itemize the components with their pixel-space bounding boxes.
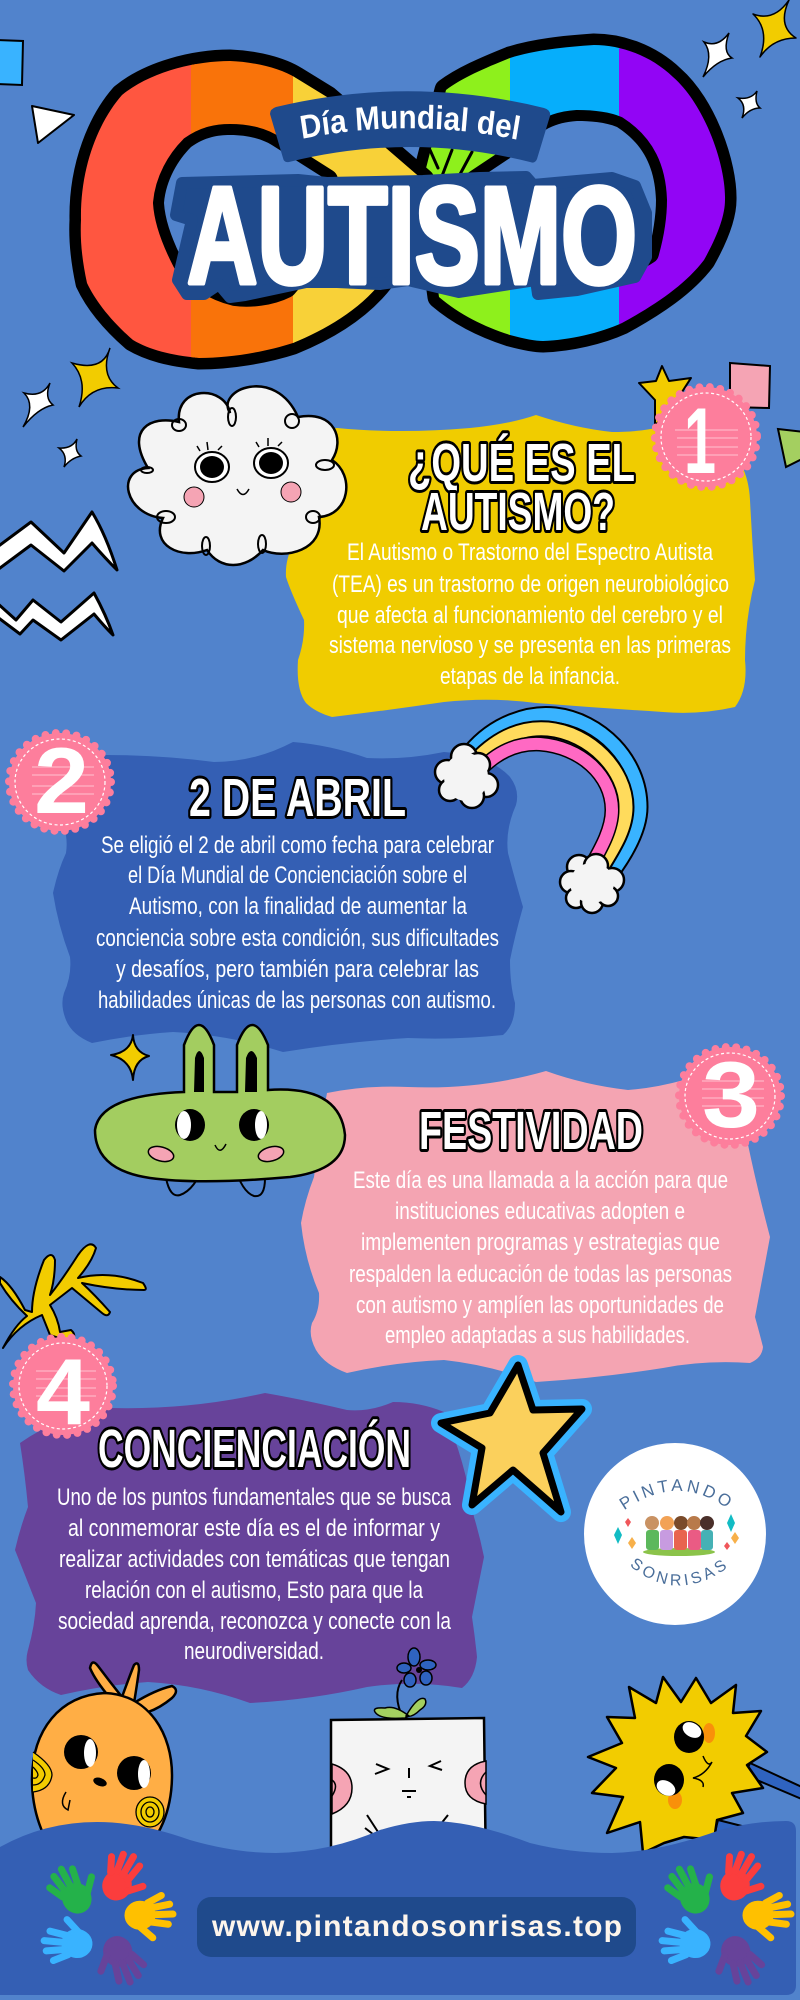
flower bbox=[374, 1648, 436, 1718]
logo: Pintando Sonrisas bbox=[584, 1443, 766, 1625]
icon: green triangle bbox=[778, 429, 800, 467]
body text: realizar actividades con temáticas que tengan bbox=[59, 1546, 450, 1573]
sun mouth bbox=[693, 1756, 712, 1787]
body text: Autismo, con la finalidad de aumentar la bbox=[129, 893, 468, 920]
panel: 2 de abril bbox=[53, 742, 523, 1052]
cloud cheeks bbox=[184, 482, 301, 507]
bunny eyes bbox=[175, 1109, 269, 1141]
badge scallop bbox=[655, 387, 757, 487]
bunny body bbox=[95, 1025, 345, 1181]
banner text: Día Mundial del bbox=[300, 104, 520, 140]
left loop colours bbox=[80, 61, 418, 358]
heading: ¿QUÉ ES EL bbox=[408, 433, 635, 493]
star halo bbox=[441, 1365, 582, 1512]
bunny legs bbox=[166, 1158, 265, 1196]
character: green bunny bbox=[95, 1025, 345, 1196]
icon: white triangle bbox=[32, 106, 74, 143]
icon: yellow star bbox=[639, 366, 692, 425]
icon: gold sparkle top right bbox=[753, 0, 796, 57]
logo disc bbox=[584, 1443, 766, 1625]
icon: large star bbox=[441, 1365, 582, 1512]
url pill: www.pintandosonrisas.top bbox=[211, 1910, 622, 1943]
panel: concienciación bbox=[15, 1393, 484, 1703]
logo curved text: SONRISAS bbox=[631, 1558, 726, 1586]
body text: y desafíos, pero también para celebrar las bbox=[116, 956, 479, 983]
orange body bbox=[32, 1693, 172, 1860]
badge scallop bbox=[13, 1337, 113, 1435]
body text: al conmemorar este día es el de informar y bbox=[68, 1515, 440, 1542]
icon: cyan square bbox=[0, 40, 23, 85]
panel background bbox=[15, 1393, 484, 1703]
panel: qué es el autismo bbox=[286, 415, 755, 717]
icon: hands left bbox=[42, 1847, 174, 1991]
title banner: Día Mundial del bbox=[270, 91, 550, 163]
body text: el Día Mundial de Concienciación sobre el bbox=[128, 862, 467, 889]
icon: white zigzag lower bbox=[0, 593, 113, 640]
icon: white sparkle left bbox=[23, 383, 53, 427]
bunny ears inner bbox=[194, 1051, 257, 1092]
heading: FESTIVIDAD bbox=[419, 1101, 643, 1161]
panel: festividad bbox=[301, 1071, 770, 1382]
character: white cloud bbox=[128, 386, 346, 565]
logo children bbox=[643, 1516, 715, 1556]
badge 1 bbox=[655, 387, 757, 493]
body text: Uno de los puntos fundamentales que se busca bbox=[57, 1484, 452, 1511]
lower cloud bbox=[560, 854, 624, 913]
badge scallop bbox=[9, 733, 111, 831]
icon: yellow branch bbox=[0, 1244, 146, 1348]
logo curved text bbox=[619, 1479, 731, 1586]
banner shape bbox=[270, 91, 550, 163]
icon: white sparkle top right bbox=[703, 33, 732, 77]
square face bbox=[365, 1761, 448, 1838]
body text: instituciones educativas adopten e bbox=[395, 1198, 685, 1225]
body text: implementen programas y estrategias que bbox=[361, 1229, 720, 1256]
footer wave bbox=[0, 1821, 796, 1995]
body text bbox=[349, 1167, 732, 1349]
orange swirls bbox=[33, 1752, 164, 1827]
title: AUTISMO bbox=[176, 159, 646, 313]
body text: conciencia sobre esta condición, sus dificultades bbox=[96, 925, 499, 952]
number: 3 bbox=[702, 1042, 760, 1147]
left hole bbox=[164, 135, 337, 296]
heading bbox=[408, 433, 635, 542]
title backing shape bbox=[176, 177, 646, 297]
badge dashed ring bbox=[685, 1053, 775, 1139]
badge 3 bbox=[679, 1042, 781, 1147]
badge 4 bbox=[13, 1337, 113, 1444]
orange mouth bbox=[62, 1792, 70, 1810]
left loop outline bbox=[81, 61, 423, 358]
body text: etapas de la infancia. bbox=[440, 663, 620, 690]
rainbow bands bbox=[470, 714, 640, 875]
number: 2 bbox=[34, 728, 89, 833]
bunny cheeks bbox=[147, 1144, 285, 1164]
body text bbox=[96, 832, 499, 1014]
body text: sociedad aprenda, reconozca y conecte con la bbox=[58, 1608, 452, 1635]
character: white square bbox=[331, 1648, 486, 1880]
sun eyes bbox=[654, 1719, 704, 1799]
icon: hands right bbox=[660, 1847, 792, 1991]
badge 2 bbox=[9, 728, 111, 833]
body text: relación con el autismo, Esto para que la bbox=[85, 1577, 423, 1604]
logo centre crossing bbox=[430, 150, 472, 178]
panel background bbox=[286, 415, 755, 717]
orange antennae bbox=[90, 1662, 176, 1712]
url pill bbox=[197, 1897, 636, 1957]
icon: gold sparkle left bbox=[72, 348, 118, 407]
cloud curls bbox=[141, 408, 334, 555]
footer band bbox=[0, 1821, 796, 1995]
logo: rainbow infinity bbox=[60, 30, 739, 370]
icon: gold sparkle near bunny bbox=[111, 1035, 149, 1080]
cloud body bbox=[128, 386, 346, 565]
cloud eyes bbox=[195, 438, 288, 482]
icon: small white star left bbox=[59, 439, 81, 467]
body text: empleo adaptadas a sus habilidades. bbox=[385, 1322, 690, 1349]
badge stripes bbox=[702, 1081, 764, 1106]
character: yellow spiky sun bbox=[588, 1677, 800, 1853]
body text: neurodiversidad. bbox=[184, 1638, 324, 1665]
number: 1 bbox=[684, 388, 716, 493]
logo curved text: PINTANDO bbox=[619, 1479, 731, 1510]
heading: CONCIENCIACIÓN bbox=[98, 1419, 411, 1479]
cloud mouth bbox=[237, 489, 249, 494]
orange eyes bbox=[64, 1735, 151, 1790]
sun body bbox=[588, 1677, 767, 1853]
badge dashed ring bbox=[19, 1343, 107, 1429]
body text: Se eligió el 2 de abril como fecha para celebrar bbox=[101, 832, 494, 859]
decorative shapes bbox=[0, 0, 800, 640]
body text bbox=[329, 539, 731, 690]
badge dashed ring bbox=[15, 739, 105, 825]
badge scallop bbox=[679, 1047, 781, 1145]
square body bbox=[331, 1718, 486, 1880]
logo sparkles bbox=[614, 1514, 739, 1550]
right loop colours bbox=[426, 45, 726, 341]
right hole bbox=[474, 121, 656, 272]
body text: El Autismo o Trastorno del Espectro Autista bbox=[347, 539, 714, 566]
panel background bbox=[53, 742, 523, 1052]
icon: small white star top right bbox=[738, 91, 760, 118]
character: orange bbox=[32, 1662, 176, 1860]
body text: habilidades únicas de las personas con autismo. bbox=[98, 987, 496, 1014]
badge stripes bbox=[32, 767, 94, 794]
heading: 2 DE ABRIL bbox=[189, 768, 406, 828]
number: 4 bbox=[36, 1339, 90, 1444]
sun cheeks bbox=[668, 1723, 715, 1809]
badge dashed ring bbox=[661, 393, 751, 481]
badge stripes bbox=[36, 1371, 96, 1396]
sun arm bbox=[715, 1763, 800, 1840]
icon: rainbow with clouds bbox=[435, 714, 640, 913]
bunny mouth bbox=[215, 1144, 226, 1150]
upper cloud bbox=[435, 744, 498, 808]
body text bbox=[57, 1484, 452, 1665]
badge stripes bbox=[675, 430, 738, 455]
star fill bbox=[441, 1365, 582, 1512]
orange nose bbox=[92, 1776, 108, 1788]
right loop outline bbox=[423, 45, 725, 341]
icon: pink square bbox=[730, 363, 770, 408]
square ears bbox=[332, 1761, 486, 1814]
panel background bbox=[301, 1071, 770, 1382]
heading: AUTISMO? bbox=[421, 482, 615, 542]
icon: white zigzag upper bbox=[0, 512, 117, 571]
